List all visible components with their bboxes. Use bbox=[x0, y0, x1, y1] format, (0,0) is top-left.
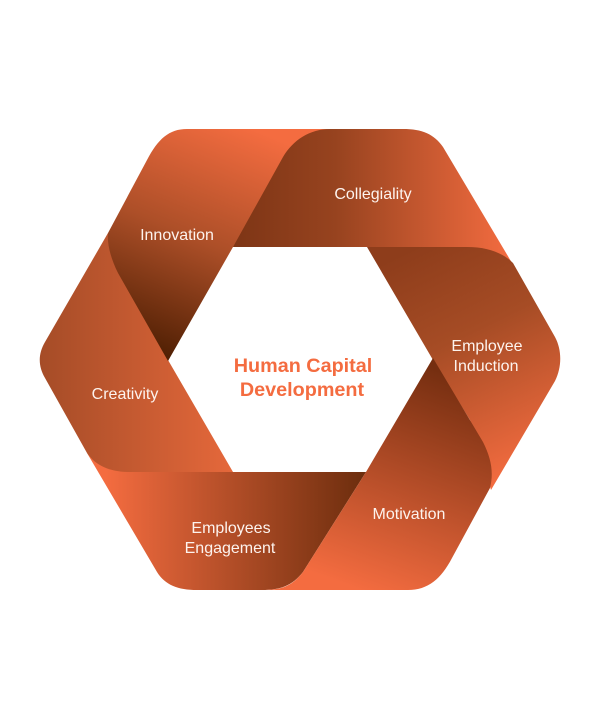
ribbon: Creativity bbox=[40, 233, 233, 472]
label: Employee Induction: Induction bbox=[454, 358, 518, 375]
center title: Development bbox=[240, 379, 365, 401]
ribbon: Innovation bbox=[108, 129, 340, 361]
label: Employee Induction: Employee bbox=[451, 338, 523, 355]
label: Creativity: Creativity bbox=[92, 386, 158, 403]
label: Collegiality: Collegiality bbox=[334, 186, 412, 203]
label: Motivation: Motivation bbox=[373, 506, 445, 523]
ribbon: Employee Induction bbox=[367, 247, 560, 490]
label: Innovation: Innovation bbox=[140, 227, 214, 244]
label: Employees Engagement: Engagement bbox=[185, 540, 276, 557]
ribbon: Collegiality bbox=[233, 129, 515, 268]
label: Employees Engagement: Employees bbox=[191, 520, 271, 537]
ribbon: Employees Engagement bbox=[87, 453, 366, 590]
center title: Human Capital bbox=[234, 355, 372, 377]
ribbon: Motivation bbox=[262, 358, 492, 590]
